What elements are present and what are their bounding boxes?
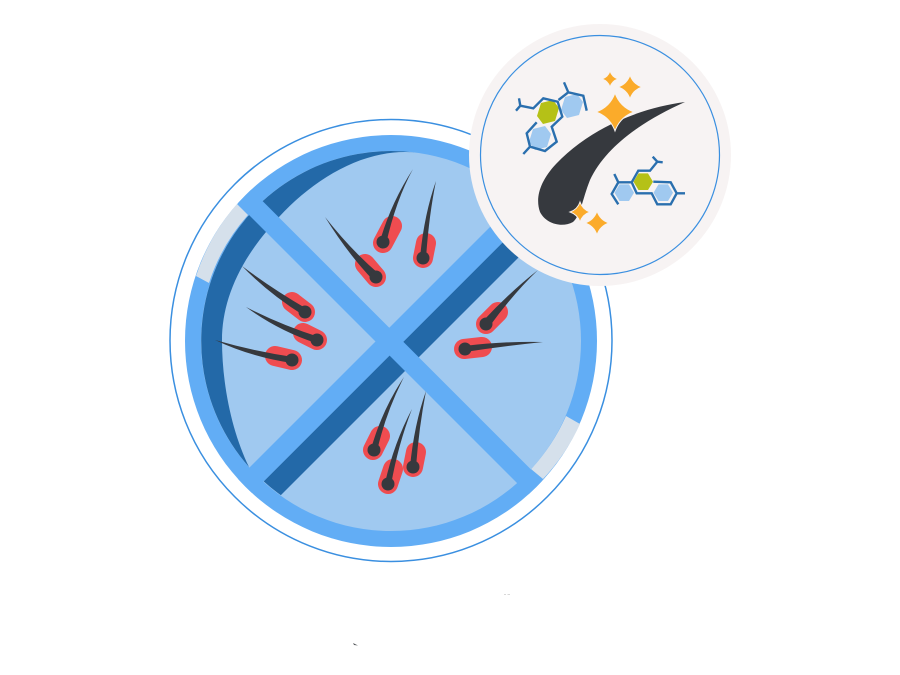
hair strand <box>538 102 685 225</box>
follicle 8 <box>480 270 538 330</box>
follicle 7 <box>458 342 543 356</box>
follicle 11 <box>406 391 426 474</box>
follicle 9 <box>368 377 404 456</box>
molecule left <box>516 82 587 154</box>
follicle 5 <box>246 307 324 346</box>
outer ring <box>170 120 612 562</box>
badge: healthy hair <box>469 24 731 286</box>
follicle 6 <box>215 340 298 366</box>
small specks <box>353 594 510 646</box>
blue rim <box>185 135 597 547</box>
illustration <box>169 24 731 646</box>
scalp disc <box>201 151 581 531</box>
follicle 2 <box>416 181 436 264</box>
molecule right <box>612 157 685 204</box>
cross bands <box>238 190 542 494</box>
pale rim segment: upper left <box>196 204 248 283</box>
follicle 10 <box>382 409 412 490</box>
follicle 1 <box>376 169 413 248</box>
follicle 3 <box>325 217 382 284</box>
sparkles <box>570 71 642 235</box>
follicle 4 <box>242 266 312 318</box>
scalp diagram <box>170 117 612 576</box>
badge inner ring <box>480 36 720 274</box>
dark band <box>264 242 518 496</box>
badge disc <box>469 24 731 286</box>
pale rim segment: lower right <box>531 416 580 479</box>
dark crescent <box>201 151 415 467</box>
